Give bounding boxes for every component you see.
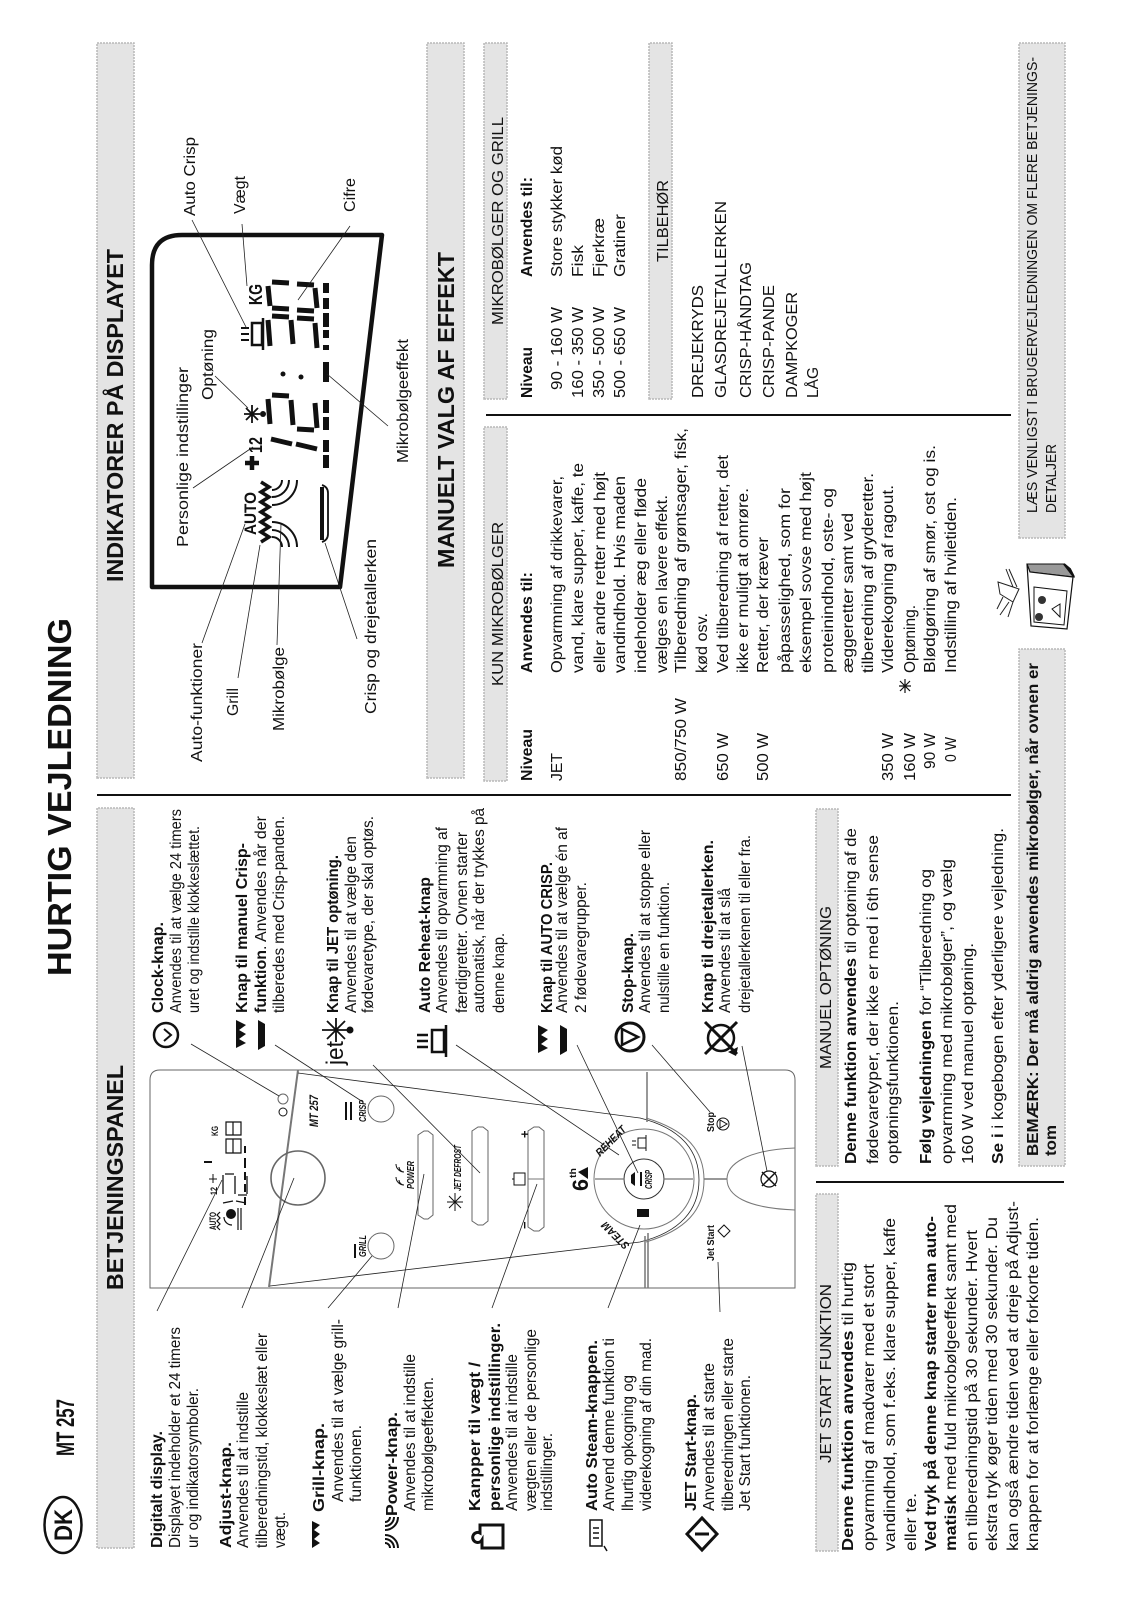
column: levels: 0 W (943, 737, 960, 762)
label: Stop-knap: Anvendes til at stoppe eller (637, 830, 654, 1013)
control panel drawing (150, 1044, 795, 1312)
column: uses: æggeretter samt ved (840, 513, 857, 673)
leader lines (157, 1044, 767, 1312)
weight slider: − (517, 1221, 532, 1229)
bar: Jet start funktion (816, 1194, 838, 1551)
label: Knap til drejetallerken: Knap til drejetallerken. (700, 840, 717, 1013)
accessories: CRISP-HÅNDTAG (738, 262, 755, 398)
label: Knap til JET optøning: jet (322, 1041, 349, 1066)
label: Knap til JET optøning: Knap til JET optøning. (325, 855, 342, 1013)
label: Knap til drejetallerken: Anvendes til at slå (717, 888, 734, 1013)
microwave waves (272, 480, 297, 547)
table: mikrobølger og grill: Niveau (519, 347, 536, 398)
accessories: GLASDREJETALLERKEN (713, 201, 730, 398)
label: Auto Reheat-knap: Anvendes til opvarmning af (434, 826, 451, 1013)
weight slider (512, 1127, 544, 1231)
display outline (152, 235, 382, 587)
label: Stop-knap: nulstille en funktion. (656, 882, 673, 1013)
callouts: Vægt (232, 175, 249, 214)
power slider (396, 1131, 433, 1219)
wheel: CRISP (644, 1170, 655, 1189)
section bar: Manuelt valg af effekt: MANUELT VALG AF EFFEKT (433, 252, 459, 568)
manuel optøning section: 160 W ved manuel optøning. (960, 943, 977, 1164)
manuel optøning section: Se i i kogebogen efter yderligere vejledning. (990, 828, 1007, 1164)
column: uses: Tilberedning af grøntsager, fisk, (673, 428, 690, 673)
label: Knap til manuel Crisp-funktion: tilberedes med Crisp-panden. (271, 816, 288, 1013)
jet start mark: Jet Start (706, 1224, 717, 1261)
power slider: POWER (406, 1160, 417, 1189)
column: uses: vandindhold. Hvis maden (612, 476, 629, 673)
table: mikrobølger og grill: 90 - 160 W (549, 307, 566, 390)
clock button (278, 1094, 288, 1116)
label: Knap til JET optøning: Anvendes til at vælge den (343, 836, 360, 1013)
label: Grill-knap: Anvendes til at vælge grill- (330, 1319, 347, 1502)
column: uses: vand, klare supper, kaffe, te (570, 463, 587, 673)
label: Adjust-knap: Anvendes til at indstille (235, 1392, 252, 1548)
jet start section (816, 1194, 1042, 1551)
6th sense logo (568, 1167, 593, 1191)
label: JET Start-knap: JET Start-knap. (683, 1394, 700, 1511)
jet start section: Denne funktion anvendes til hurtig (840, 1262, 857, 1551)
label: Adjust-knap: vægt. (272, 1512, 289, 1548)
label: Digitalt display: ur og indikatorsymboler. (185, 1388, 202, 1548)
callouts (175, 137, 412, 762)
label: Power-knap (384, 1354, 437, 1548)
label: Auto Steam-knappen: Anvend denne funktion ti (601, 1338, 618, 1511)
icon: defrost star (899, 679, 911, 693)
label: Adjust-knap: Adjust-knap. (218, 1442, 235, 1548)
label: Grill-knap: Grill-knap. (311, 1423, 328, 1512)
column: levels: 850/750 W (673, 698, 690, 781)
jet start section: Ved tryk på denne knap starter man auto- (923, 1216, 940, 1551)
column: uses: kød osv. (694, 613, 711, 673)
bar: Mikrobølger og grill: MIKROBØLGER OG GRILL (490, 117, 507, 325)
personal settings: 12 (246, 437, 266, 453)
label: Power-knap: Anvendes til at indstille (402, 1354, 419, 1511)
section bar: Indikatorer på displayet (97, 43, 134, 778)
turntable button (727, 1148, 795, 1210)
label: Knap til drejetallerken: drejetallerkenen til eller fra. (737, 835, 754, 1013)
panel display: KG (210, 1126, 220, 1136)
control panel labels, left group (149, 1319, 754, 1551)
label: Auto Steam-knappen: viderekogning af din mad. (638, 1338, 655, 1511)
stop mark: Stop (706, 1112, 717, 1132)
section bar: Betjeningspanel: BETJENINGSPANEL (102, 1065, 128, 1290)
column: uses: proteinindhold, oste- og (820, 488, 837, 673)
label: Stop-knap: Stop-knap. (620, 933, 637, 1013)
jet start section: kan også ændre tiden ved at dreje på Adjust- (1005, 1201, 1022, 1551)
column: uses: Indstilling af hviletiden. (943, 497, 960, 673)
wheel: STEAM (599, 1218, 632, 1251)
model mark: MT 257 (307, 1094, 321, 1127)
callouts: Mikrobølgeeffekt (395, 338, 412, 463)
label: Digitalt display: Displayet indeholder et 24 timers (167, 1327, 184, 1548)
bar: Tilbehør: TILBEHØR (655, 180, 672, 262)
jet start section: ekstra tryk øger tiden med 30 sekunder. Du (984, 1217, 1001, 1551)
wheel (594, 1123, 694, 1251)
label: Knap til AUTO CRISP: Anvendes til at vælge én af (554, 826, 571, 1013)
column: levels: 650 W (715, 733, 732, 781)
jet start section: en tilberedningstid på 30 sekunder. Hvert (964, 1229, 981, 1551)
note: læs venligst: DETALJER (1043, 444, 1060, 513)
accessories: DREJEKRYDS (690, 285, 707, 398)
panel display: AUTO (208, 1212, 218, 1230)
bar: Kun mikrobølger (484, 427, 507, 781)
label: Knap til manuel Crisp-funktion (234, 816, 288, 1050)
column: levels: 90 W (922, 733, 939, 769)
label: Adjust-knap (218, 1333, 289, 1548)
column: uses: eksempel sovse med højt (798, 471, 815, 673)
badge: DK: DK (50, 1509, 78, 1541)
callouts: Grill (225, 688, 242, 716)
column: uses: ikke er muligt at omrøre. (735, 488, 752, 673)
column: uses: Retter, der kræver (755, 537, 772, 673)
column: levels (519, 698, 960, 781)
label: Knap til JET optøning: fødevaretype, der skal optøs. (360, 816, 377, 1013)
column: levels: 500 W (755, 733, 772, 781)
label: Knapper til vægt: indstillinger. (539, 1433, 556, 1511)
table: mikrobølger og grill: Gratiner (612, 214, 629, 277)
bar: Mikrobølger og grill (484, 43, 507, 399)
column: uses: Viderekogning af ragout. (880, 485, 897, 673)
table: mikrobølger og grill: Fjerkræ (591, 218, 608, 277)
label: Digitalt display: Digitalt display. (149, 1431, 166, 1548)
note: bemærk: tom (1043, 1125, 1060, 1156)
wheel: REHEAT (594, 1123, 630, 1159)
label: Knap til JET optøning (322, 816, 377, 1066)
label: Auto Reheat-knap: Auto Reheat-knap (417, 877, 434, 1013)
label: JET Start-knap (683, 1338, 754, 1550)
crisp button: CRISP (358, 1100, 369, 1122)
table: mikrobølger og grill: 500 - 650 W (612, 307, 629, 398)
table: mikrobølger og grill: Store stykker kød (549, 146, 566, 277)
label: Grill-knap (311, 1319, 365, 1548)
model name: MT 257 (52, 1399, 80, 1456)
label: Auto Steam-knappen (584, 1338, 655, 1551)
grill button (354, 1233, 394, 1259)
column: uses: Optøning. (902, 605, 919, 673)
weight slider: + (517, 1130, 532, 1138)
defrost star (244, 405, 266, 423)
badge: DK (44, 1497, 82, 1553)
column: levels: Niveau (519, 729, 536, 781)
accessories: DAMPKOGER (784, 292, 801, 398)
callouts: Mikrobølge (271, 647, 288, 731)
label: Knapper til vægt: personlige indstillinger. (487, 1323, 504, 1511)
panel display: 12 (209, 1187, 219, 1195)
label: Digitalt display (149, 1327, 202, 1548)
jet start section: matisk med fuld mikrobølgeeffekt samt med (943, 1204, 960, 1551)
callouts: Crisp og drejetallerken (363, 539, 380, 714)
section bar: Manuelt valg af effekt (427, 43, 464, 778)
column: uses: indeholder æg eller fløde (633, 478, 650, 673)
dividers (97, 794, 1011, 796)
jet start section: opvarmning af madvarer med et stort (861, 1263, 878, 1551)
jet start section: knappen for at forlænge eller forkorte tiden. (1025, 1217, 1042, 1551)
callouts: Auto Crisp (182, 137, 199, 216)
KG: KG (246, 284, 266, 305)
section bar: Indikatorer på displayet: INDIKATORER PÅ DISPLAYET (101, 249, 128, 582)
column: uses: tilberedning af gryderetter. (860, 473, 877, 673)
display diagram (152, 137, 412, 762)
accessories: CRISP-PANDE (761, 285, 778, 398)
column: uses: Ved tilberedning af retter, det (715, 454, 732, 673)
label: Stop-knap (616, 830, 673, 1051)
grill button: GRILL (358, 1235, 369, 1257)
accessories: LÅG (805, 367, 822, 398)
icon: oven with book (997, 564, 1074, 629)
digits 12:30 (268, 282, 317, 449)
label: Clock-knap: Anvendes til at vælge 24 timers (168, 809, 185, 1013)
grill zigzag (261, 482, 269, 542)
table: mikrobølger og grill (484, 43, 629, 399)
jet defrost slider (447, 1127, 488, 1225)
personal settings (245, 437, 266, 470)
label: Clock-knap: Clock-knap. (150, 922, 167, 1013)
table: mikrobølger og grill: 350 - 500 W (591, 307, 608, 398)
callouts: Cifre (342, 178, 359, 212)
label: Knap til AUTO CRISP: 2 fødevaregrupper. (573, 882, 590, 1013)
crisp button (345, 1096, 394, 1122)
column: levels: 350 W (880, 733, 897, 781)
label: Auto Steam-knappen: lhurtig opkogning og (620, 1375, 637, 1511)
note: bemærk (1019, 649, 1065, 1166)
column: uses: Opvarmning af drikkevarer, (549, 476, 566, 673)
title: HURTIG VEJLEDNING (41, 618, 78, 976)
column: uses: Blødgøring af smør, ost og is. (922, 445, 939, 673)
label: Power-knap: mikrobølgeeffekten. (420, 1377, 437, 1511)
table: kun mikrobølger (484, 427, 960, 781)
label: Adjust-knap: tilberedningstid, klokkeslæt eller (254, 1333, 271, 1548)
callouts: Personlige indstillinger (175, 367, 192, 547)
section bar: Betjeningspanel (97, 808, 134, 1548)
label: Auto Reheat-knap: denne knap. (491, 933, 508, 1013)
manuel optøning section: optøningsfunktionen. (885, 1001, 902, 1164)
table: mikrobølger og grill: Anvendes til: (519, 177, 536, 277)
power dashes (323, 283, 329, 468)
crisp and turntable (320, 487, 324, 540)
label: Auto Reheat-knap (417, 808, 508, 1057)
label: Auto Reheat-knap: automatisk, når der trykkes på (471, 808, 488, 1013)
auto indicator: AUTO (241, 492, 260, 535)
label: Power-knap: Power-knap. (384, 1412, 401, 1516)
note: læs venligst: LÆS VENLIGST I BRUGERVEJLEDNINGEN OM FLERE BETJENINGS- (1024, 57, 1041, 513)
bar: Tilbehør (649, 43, 672, 399)
reheat icon (241, 318, 263, 350)
bar: Kun mikrobølger: KUN MIKROBØLGER (490, 522, 507, 686)
jet defrost slider: JET DEFROST (453, 1144, 464, 1191)
column: levels: 160 W (902, 733, 919, 781)
bar: Jet start funktion: JET START FUNKTION (818, 1284, 835, 1463)
control panel labels, right group (150, 808, 754, 1066)
jet start section: eller te. (903, 1493, 920, 1551)
panel display (204, 1122, 247, 1230)
label: Knapper til vægt: vægten eller de personlige (523, 1329, 540, 1511)
manuel optøning section: opvarmning med mikrobølger”, og vælg (939, 859, 956, 1164)
column: levels: JET (549, 752, 566, 781)
jet start section: vandindhold, som f.eks. klare supper, kaffe (882, 1218, 899, 1551)
column: uses: Anvendes til: (519, 572, 536, 673)
accessories (649, 43, 822, 399)
label: Knap til manuel Crisp-funktion: Knap til manuel Crisp- (234, 843, 251, 1013)
6th sense logo: 6 (568, 1179, 593, 1191)
label: Knap til manuel Crisp-funktion: funktion. Anvendes når der (253, 816, 270, 1013)
label: Auto Steam-knappen: Auto Steam-knappen. (584, 1340, 601, 1511)
label: Grill-knap: funktionen. (348, 1425, 365, 1502)
bar: Manuel optøning (816, 809, 838, 1166)
jet start mark (706, 1224, 730, 1261)
label: Auto Reheat-knap: færdigretter. Ovnen starter (454, 832, 471, 1013)
label: JET Start-knap: Anvendes til at starte (701, 1363, 718, 1511)
label: Knapper til vægt: Anvendes til at indstille (504, 1354, 521, 1511)
label: Knapper til vægt (467, 1323, 556, 1548)
stop mark (706, 1112, 729, 1132)
adjust knob (271, 1151, 325, 1205)
label: Knap til AUTO CRISP: Knap til AUTO CRISP. (539, 862, 556, 1013)
column: uses: vælges en lavere effekt. (654, 495, 671, 673)
note: læs venligst (1019, 43, 1065, 538)
6th sense logo: th (568, 1168, 578, 1178)
table: mikrobølger og grill: Fisk (570, 245, 587, 277)
table: mikrobølger og grill: 160 - 350 W (570, 307, 587, 398)
callouts: Auto-funktioner (189, 643, 206, 762)
label: JET Start-knap: Jet Start funktionen. (737, 1375, 754, 1511)
manuel optøning section: Denne funktion anvendes til optøning af de (843, 828, 860, 1164)
label: Knapper til vægt: Kanpper til vægt / (467, 1361, 484, 1511)
callout lines (192, 220, 388, 678)
label: JET Start-knap: tilberedningen eller starte (720, 1338, 737, 1511)
manuel optøning section: Følg vejledningen for “Tilberedning og (918, 869, 935, 1164)
label: Clock-knap: uret og indstille klokkeslættet. (186, 826, 203, 1013)
column: uses: eller andre retter med højt (592, 471, 609, 673)
manuel optøning section: fødevaretyper, der ikke er med i 6th sense (865, 835, 882, 1164)
bar: Manuel optøning: MANUEL OPTØNING (818, 906, 835, 1069)
column: uses (519, 428, 960, 673)
callouts: Optøning (200, 329, 217, 400)
manuel optøning section (816, 809, 1007, 1166)
note: bemærk: BEMÆRK: Der må aldrig anvendes mikrobølger, når ovnen er (1025, 663, 1042, 1156)
label: Knap til drejetallerken (700, 835, 754, 1056)
label: Clock-knap (150, 809, 203, 1047)
column: uses: påpasselighed, som for (777, 488, 794, 673)
label: Knap til AUTO CRISP (538, 826, 590, 1055)
